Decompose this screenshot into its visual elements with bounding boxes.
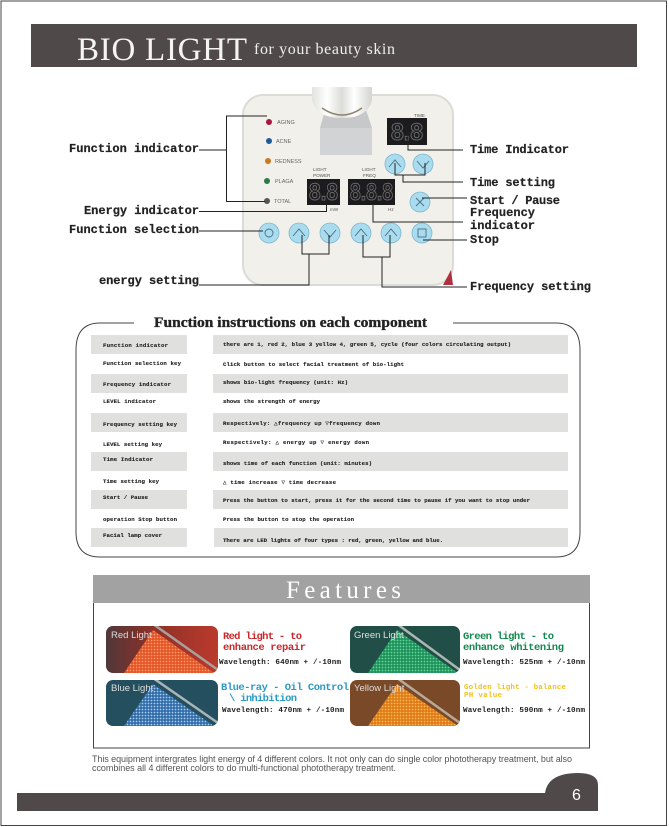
time display: TIME xyxy=(414,113,425,118)
function instructions heading: Function instructions on each component xyxy=(154,315,427,331)
light power display: 8.8 xyxy=(309,179,338,206)
red light caption: Wavelength: 640nm + /-10nm xyxy=(219,659,341,667)
function table: Frequency setting key xyxy=(103,421,178,428)
function table: Start / Pause xyxy=(103,494,149,501)
leader lines xyxy=(199,116,467,287)
function indicator LEDs: TOTAL xyxy=(274,199,291,205)
red light photo xyxy=(106,624,218,673)
title: BIO LIGHT xyxy=(77,32,247,68)
function table xyxy=(91,335,568,547)
light frequency display xyxy=(348,167,395,212)
light frequency display: LIGHT xyxy=(362,167,376,172)
yellow light caption xyxy=(463,684,585,715)
light frequency display: Hz xyxy=(388,207,394,212)
subtitle: for your beauty skin xyxy=(254,41,395,58)
function table: operation Stop button xyxy=(103,516,178,523)
blue light caption: \ inhibition xyxy=(229,693,297,705)
red light photo: Red Light xyxy=(111,630,152,641)
blue light photo: Blue Light xyxy=(111,683,154,694)
light power display: mW xyxy=(330,207,339,212)
function table: Time setting key xyxy=(103,478,160,485)
callout labels: energy setting xyxy=(99,274,199,288)
features panel xyxy=(93,575,590,748)
function table: Function selection key xyxy=(103,360,182,367)
green light caption: Wavelength: 525nm + /-10nm xyxy=(463,659,585,667)
callout labels: Start / Pause xyxy=(470,194,560,208)
function indicator LEDs: PLAGA xyxy=(275,179,294,185)
yellow light photo: Yellow Light xyxy=(354,683,405,694)
callout labels: Time Indicator xyxy=(470,143,569,157)
function table: Press the button to start, press it for the second time to pause if you want to stop under xyxy=(223,497,530,504)
function table: Respectively: △frequency up ▽frequency down xyxy=(223,420,381,427)
green light photo: Green Light xyxy=(354,630,404,641)
device control panel photo xyxy=(243,87,453,285)
light power display: POWER xyxy=(313,173,331,178)
yellow light caption: PH value xyxy=(464,692,502,700)
yellow light caption: Wavelength: 590nm + /-10nm xyxy=(463,707,585,715)
function indicator LEDs: REDNESS xyxy=(275,159,302,165)
function indicator LEDs: AGING xyxy=(277,120,295,126)
callout labels: Stop xyxy=(470,233,499,247)
features heading band: Features xyxy=(286,577,401,604)
function table: shows bio-light frequency (unit: Hz) xyxy=(223,379,348,386)
footer band xyxy=(17,773,598,811)
time display: 8.8 xyxy=(391,119,423,146)
time display xyxy=(387,113,427,146)
header band xyxy=(31,24,637,68)
description paragraph xyxy=(92,754,572,773)
blue light caption: Blue-ray - Oil Control xyxy=(221,682,349,694)
callout labels: Function selection xyxy=(69,223,199,237)
callout labels: Function indicator xyxy=(69,142,199,156)
function table: △ time increase ▽ time decrease xyxy=(223,479,337,486)
function table: Function indicator xyxy=(103,342,168,349)
callout labels: Energy indicator xyxy=(84,204,199,218)
red light caption: enhance repair xyxy=(223,642,306,654)
function table: there are 1, red 2, blue 3 yellow 4, green 5, cycle (four colors circulating output) xyxy=(223,341,511,348)
features heading band xyxy=(93,575,590,604)
function table: Facial lamp cover xyxy=(103,532,162,539)
function indicator LEDs: ACNE xyxy=(276,139,292,145)
callout labels: indicator xyxy=(470,219,535,233)
function table: Press the button to stop the operation xyxy=(223,516,355,523)
function table: Click button to select facial treatment of bio-light xyxy=(223,361,404,368)
green light caption: Green light - to xyxy=(463,631,554,643)
light power display xyxy=(307,167,340,212)
red light caption: Red light - to xyxy=(223,631,302,643)
function table: shows the strength of energy xyxy=(223,398,321,405)
control buttons xyxy=(259,154,433,243)
light power display: LIGHT xyxy=(313,167,327,172)
callout labels xyxy=(69,142,591,294)
function table: There are LED lights of four types : red, green, yellow and blue. xyxy=(223,537,443,544)
callout labels: Time setting xyxy=(470,176,555,190)
function table: LEVEL indicator xyxy=(103,398,156,405)
description paragraph: ccombines all 4 different colors to do multi-functional phototherapy treatment. xyxy=(92,763,396,773)
red light caption xyxy=(219,631,341,667)
function table: Respectively: △ energy up ▽ energy down xyxy=(223,439,370,446)
function table: shows time of each function (unit: minutes) xyxy=(223,460,372,467)
function table: Frequency indicator xyxy=(103,381,171,388)
blue light photo xyxy=(106,678,218,726)
green light photo xyxy=(350,624,460,673)
blue light caption: Wavelength: 470nm + /-10nm xyxy=(222,707,344,715)
callout labels: Frequency xyxy=(470,206,535,220)
function table: LEVEL setting key xyxy=(103,441,163,448)
light frequency display: FREQ xyxy=(363,173,376,178)
yellow light photo xyxy=(350,678,460,726)
callout labels: Frequency setting xyxy=(470,280,591,294)
device neck xyxy=(312,87,372,155)
function table: Time Indicator xyxy=(103,456,153,463)
function instructions frame xyxy=(76,323,580,557)
green light caption xyxy=(463,631,585,667)
light frequency display: 8.8.8 xyxy=(350,179,393,206)
blue light caption xyxy=(221,682,349,715)
yellow light caption: Golden light - balance xyxy=(464,684,566,692)
function indicator LEDs xyxy=(264,119,302,205)
page number: 6 xyxy=(572,787,581,804)
green light caption: enhance whitening xyxy=(463,642,564,654)
description paragraph: This equipment intergrates light energy of 4 different colors. It not only can do single color phototherapy treatment, but also xyxy=(92,754,572,764)
